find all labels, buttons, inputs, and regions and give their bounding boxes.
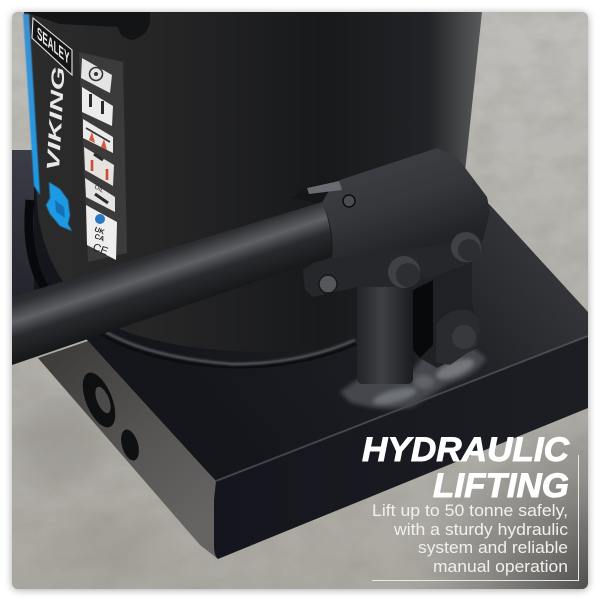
top bracket on cylinder <box>24 12 150 40</box>
pump bracket leg <box>413 262 480 368</box>
handle tube <box>12 202 331 365</box>
icon: wheel <box>81 58 112 93</box>
handle clamp head <box>322 148 490 258</box>
plate side mounting holes <box>82 372 139 460</box>
body text <box>372 502 568 576</box>
icon: certification marks: CA <box>93 233 105 243</box>
plate top face <box>34 176 588 481</box>
plate front face <box>214 336 588 559</box>
hydraulic piston <box>357 285 413 384</box>
heading: HYDRAULIC LIFTING: LIFTING <box>433 467 569 505</box>
icon: oil <box>85 178 115 212</box>
icon: jack ok and no <box>82 87 113 126</box>
plate front edge highlight <box>216 336 588 481</box>
clamp screw <box>319 275 337 293</box>
icon: certification marks: UK <box>93 226 105 236</box>
clamp pin <box>343 195 355 207</box>
brand label: SEALEY <box>32 18 72 75</box>
safety icon sticker <box>79 52 127 262</box>
weld bead <box>340 345 486 409</box>
clamp bolt: centre <box>388 256 420 288</box>
icon: lift arrows <box>84 147 114 186</box>
body text: with a sturdy hydraulic <box>393 521 568 539</box>
blue stripe on cylinder <box>23 14 40 195</box>
body text: Lift up to 50 tonne safely, <box>372 502 568 520</box>
handle clamp ear <box>292 180 345 204</box>
icon: axle stands <box>83 119 113 153</box>
clamp lower plate <box>303 240 483 297</box>
corner frame line <box>372 455 578 580</box>
brand text: VIKING: VIKING <box>43 66 68 171</box>
brand text: SEALEY: SEALEY <box>37 23 70 69</box>
heading: HYDRAULIC LIFTING <box>362 436 570 498</box>
bracket link with bolt <box>436 310 480 365</box>
clip on clamp <box>307 181 342 194</box>
icon: blue badge <box>46 182 72 231</box>
icon: oil: OIL <box>93 184 105 195</box>
icon: certification marks: CE <box>91 242 109 258</box>
body text: system and reliable <box>418 539 568 557</box>
left plate piece behind jack <box>12 150 34 300</box>
base plate <box>12 150 588 559</box>
sticker backing <box>79 52 127 262</box>
body text: manual operation <box>433 558 568 576</box>
jack cylinder <box>24 12 482 365</box>
heading: HYDRAULIC LIFTING: HYDRAULIC <box>362 431 569 469</box>
clamp bolt: right <box>451 232 481 262</box>
icon: certification marks <box>86 205 117 260</box>
plate side face <box>38 341 218 559</box>
weld ring around cylinder <box>100 331 355 365</box>
